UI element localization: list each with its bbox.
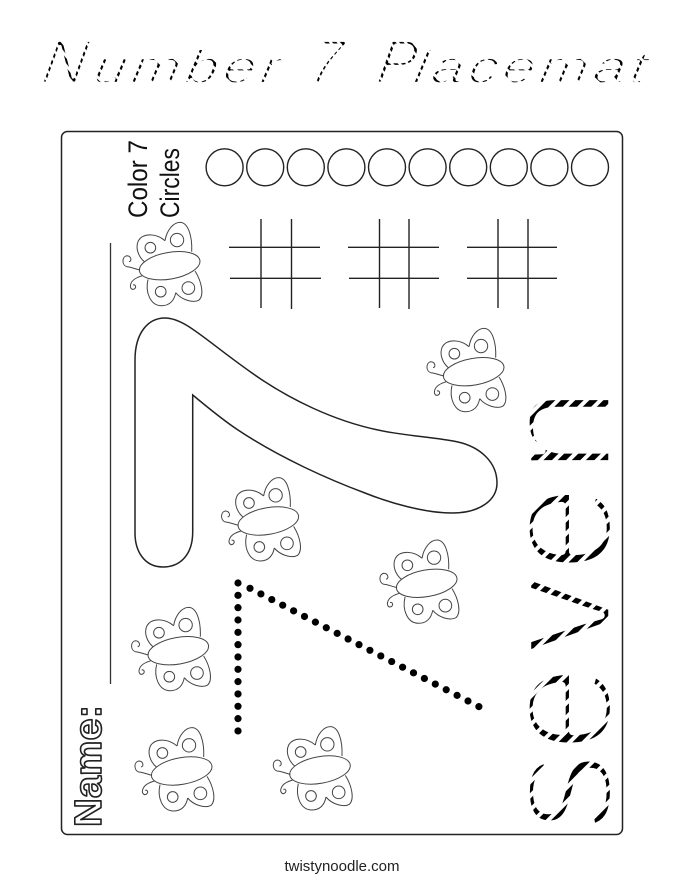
dotted tracing number 7 bbox=[238, 583, 479, 732]
icon: butterfly 7 bbox=[273, 727, 353, 810]
title: P bbox=[373, 27, 423, 97]
panel: placemat frame bbox=[62, 132, 622, 834]
icon: butterfly 3 bbox=[222, 478, 301, 561]
title: umber bbox=[90, 42, 288, 94]
big outlined number 7 bbox=[135, 318, 497, 567]
icon: butterfly 6 bbox=[135, 728, 214, 811]
name label: Name: bbox=[68, 705, 110, 827]
heading: color 7 circles: Circles bbox=[155, 148, 185, 218]
icon: butterfly 2 bbox=[427, 328, 506, 412]
dashed tracing word seven: seven bbox=[467, 386, 646, 832]
icon: butterfly 5 bbox=[132, 607, 211, 691]
title: N bbox=[38, 27, 95, 97]
name writing line bbox=[110, 243, 112, 684]
footer website: twistynoodle.com bbox=[284, 858, 400, 875]
icon: butterfly 4 bbox=[380, 540, 459, 623]
heading: color 7 circles bbox=[123, 140, 185, 218]
heading: color 7 circles: Color 7 bbox=[123, 140, 153, 218]
icon: butterfly 1 bbox=[123, 222, 202, 306]
title: lacemat bbox=[410, 42, 654, 94]
row of ten circles to color bbox=[206, 149, 608, 186]
title: 7 bbox=[306, 27, 350, 97]
tic-tac-toe grids bbox=[229, 219, 557, 309]
title bbox=[38, 27, 654, 97]
